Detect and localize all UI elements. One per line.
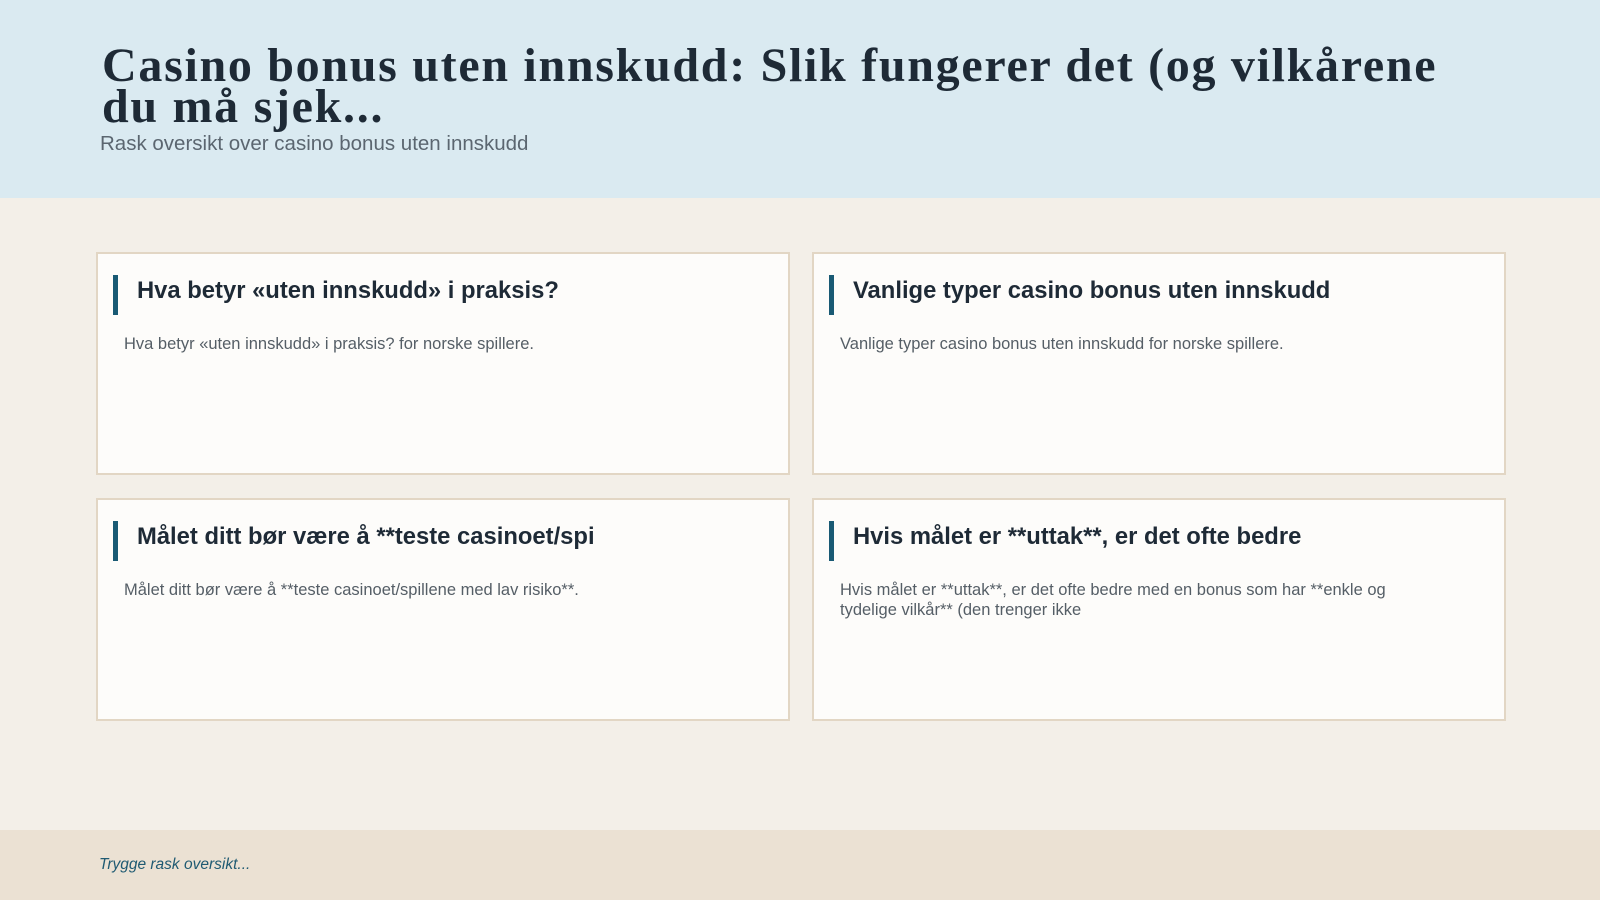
accent bar xyxy=(113,275,118,315)
heading: Målet ditt bør være å **teste casinoet/spi xyxy=(137,523,595,550)
body text: tydelige vilkår** (den trenger ikke xyxy=(840,601,1081,619)
subtitle: Rask oversikt over casino bonus uten innskudd xyxy=(100,132,528,155)
footer text: Trygge rask oversikt... xyxy=(99,856,250,873)
accent bar xyxy=(829,275,834,315)
panel: uten innskudd i praksis xyxy=(96,252,790,475)
panel: uttak xyxy=(812,498,1506,721)
body text: Hva betyr «uten innskudd» i praksis? for norske spillere. xyxy=(124,335,534,353)
panel: målet ditt xyxy=(96,498,790,721)
body text: Vanlige typer casino bonus uten innskudd for norske spillere. xyxy=(840,335,1284,353)
footer xyxy=(0,830,1600,900)
accent bar xyxy=(829,521,834,561)
heading: Hvis målet er **uttak**, er det ofte bedre xyxy=(853,523,1301,550)
accent bar xyxy=(113,521,118,561)
title: du må sjek... xyxy=(102,80,384,133)
body text: Hvis målet er **uttak**, er det ofte bedre med en bonus som har **enkle og xyxy=(840,581,1386,599)
title xyxy=(102,39,1437,133)
heading: Hva betyr «uten innskudd» i praksis? xyxy=(137,277,559,304)
body text xyxy=(840,581,1386,619)
heading: Vanlige typer casino bonus uten innskudd xyxy=(853,277,1330,304)
title: Casino bonus uten innskudd: Slik fungerer det (og vilkårene xyxy=(102,39,1437,92)
header band xyxy=(0,0,1600,198)
panel: vanlige typer xyxy=(812,252,1506,475)
body text: Målet ditt bør være å **teste casinoet/spillene med lav risiko**. xyxy=(124,581,579,599)
